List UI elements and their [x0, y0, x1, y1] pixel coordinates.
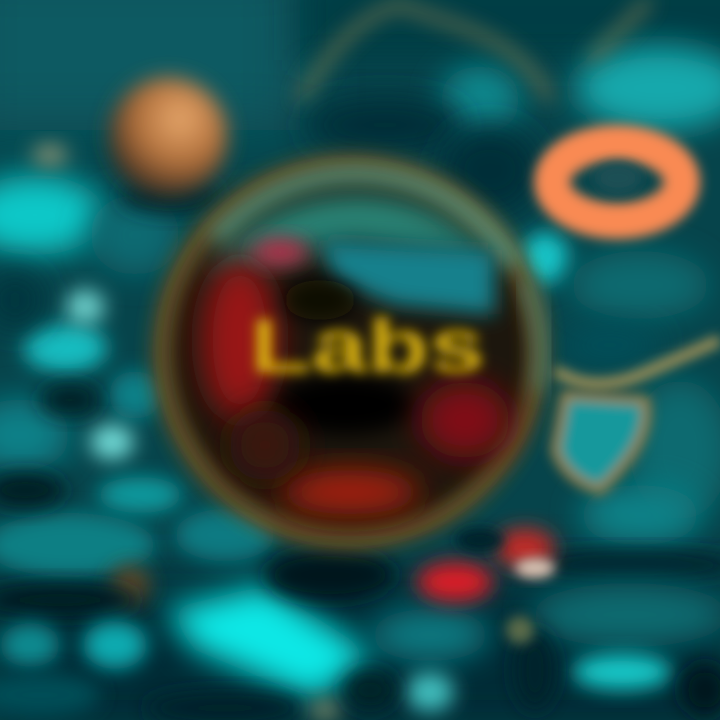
magnifying glass handle — [555, 340, 720, 490]
icon: copper sphere — [108, 77, 228, 213]
lens label text: Labs — [250, 304, 485, 389]
thin golden lines at top — [300, 0, 650, 100]
right teal blocks — [305, 46, 720, 716]
bright cyan block bottom — [145, 549, 490, 720]
magnifying glass lens — [162, 164, 543, 540]
orange ring — [552, 143, 682, 221]
left teal blocks — [0, 143, 275, 717]
red and white capsule — [417, 528, 555, 602]
